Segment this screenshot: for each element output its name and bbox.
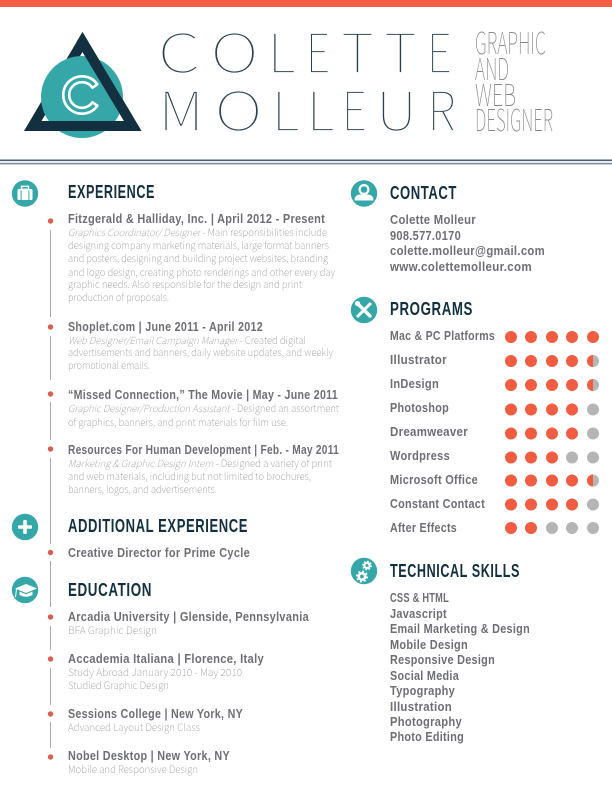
job: Resources For Human Development: Marketing & Graphic Design Intern - Designed a variety of print [68,456,333,470]
heading: experience: EXPERIENCE [68,182,155,202]
job: Missed Connection [68,387,340,429]
title: name [158,10,455,147]
title: name: C [158,10,200,88]
job: Shoplet.com [68,319,333,372]
title: name: O [215,69,262,146]
rating: Dreamweaver: Dreamweaver [390,424,468,439]
text: skills list: Email Marketing & Design [390,621,530,636]
job: Fitzgerald & Halliday: designing company marketing materials, large format banners [68,238,329,252]
rating: Mac & PC Platforms [390,328,599,343]
title: name: E [306,10,330,88]
rating: Photoshop: Photoshop [390,400,449,415]
job: Missed Connection: “Missed Connection,” The Movie | May - June 2011 [68,387,338,402]
school: Sessions College [68,706,243,734]
heading: additional experience: ADDITIONAL EXPERIENCE [68,516,248,536]
school: Sessions College: Advanced Layout Design Class [68,720,200,734]
text: creative director: Creative Director for Prime Cycle [68,545,250,560]
school: Accademia Italiana: Studied Graphic Design [68,678,169,692]
subtitle: graphic and web designer: WEB [475,71,516,115]
title: name: L [268,11,295,88]
panel: additional experience [12,514,250,560]
school: Arcadia University [68,609,309,637]
text: contact details: 908.577.0170 [390,228,461,243]
school: Nobel Desktop [68,748,230,776]
panel: contact [351,180,545,274]
job: Fitzgerald & Halliday: graphic needs. Also responsible for the design and print [68,277,303,291]
timeline: left column [48,218,53,760]
icon: person [351,180,377,207]
title: name: U [376,69,417,146]
title: name: T [384,10,417,88]
heading: education: EDUCATION [68,580,152,600]
rating: Photoshop [390,400,599,416]
rating: Illustrator [390,352,599,367]
icon: crossed tools [351,297,377,323]
text: skills list [390,590,530,744]
rating: InDesign [390,376,599,391]
job: Resources For Human Development [68,442,339,496]
school: Arcadia University: BFA Graphic Design [68,623,157,637]
job: Fitzgerald & Halliday: production of proposals. [68,290,169,304]
icon: logo triangle with circle and C [24,32,142,138]
panel: technical skills [351,558,530,744]
subtitle: graphic and web designer [475,19,553,140]
job: Resources For Human Development: and web materials, including but not limited to brochures, [68,469,311,483]
job: Shoplet.com: advertisements and banners, daily website updates, and weekly [68,345,333,359]
job: Fitzgerald & Halliday: Fitzgerald & Halliday, Inc. | April 2012 - Present [68,211,325,226]
icon: graduation cap [12,577,38,603]
text: skills list: Typography [390,683,455,698]
rating: Wordpress: Wordpress [390,448,450,463]
job: Resources For Human Development: banners, logos, and advertisements. [68,482,217,496]
rating: Microsoft Office: Microsoft Office [390,472,478,487]
text: skills list: Social Media [390,668,459,683]
icon: plus [12,514,38,540]
text: skills list: Responsive Design [390,652,495,667]
school: Arcadia University: Arcadia University | Glenside, Pennsylvania [68,609,309,624]
school: Accademia Italiana [68,651,264,692]
rating: After Effects [390,520,599,535]
rating: Illustrator: Illustrator [390,352,447,367]
job: Shoplet.com: Web Designer/Email Campaign Manager - Created digital [68,333,306,347]
school: Nobel Desktop: Nobel Desktop | New York, NY [68,748,230,763]
rating: Constant Contact [390,496,599,511]
school: Accademia Italiana: Study Abroad January 2010 - May 2010 [68,665,242,679]
title: name: E [342,69,367,147]
subtitle: graphic and web designer: GRAPHIC [475,19,546,63]
school: Sessions College: Sessions College | New York, NY [68,706,243,721]
job: Missed Connection: of graphics, banners, and print materials for film use. [68,415,288,429]
job: Fitzgerald & Halliday: and logo design, creating photo renderings and other every day [68,265,335,279]
title: name: M [159,69,203,147]
text: skills list: Photo Editing [390,729,464,744]
subtitle: graphic and web designer: AND [475,45,509,89]
title: name: R [428,69,455,146]
panel: experience [12,180,340,496]
text: skills list: Mobile Design [390,637,468,652]
title: name: O [211,11,258,88]
rating: Mac & PC Platforms: Mac & PC Platforms [390,328,495,343]
heading: programs: PROGRAMS [390,299,473,319]
rating: InDesign: InDesign [390,376,439,391]
job: Fitzgerald & Halliday [68,211,335,304]
subtitle: graphic and web designer: DESIGNER [475,96,553,140]
title: name: E [427,11,452,89]
heading: contact: CONTACT [390,183,457,203]
text: skills list: Illustration [390,699,452,714]
panel: programs [351,297,599,535]
job: Shoplet.com: Shoplet.com | June 2011 - April 2012 [68,319,263,334]
rating: Microsoft Office [390,472,599,487]
title: name: L [272,69,299,146]
job: Fitzgerald & Halliday: and posters, designing and building project websites, branding [68,251,329,265]
top accent bar [0,0,612,7]
school: Accademia Italiana: Accademia Italiana | Florence, Italy [68,651,264,666]
panel: education [12,577,309,776]
text: skills list: Javascript [390,606,447,621]
job: Fitzgerald & Halliday: Graphics Coordinator/ Designer - Main responsibilities include [68,225,327,239]
text: contact details: colette.molleur@gmail.com [390,243,545,258]
job: Shoplet.com: promotional emails. [68,358,150,372]
rating: Constant Contact: Constant Contact [390,496,485,511]
heading: technical skills: TECHNICAL SKILLS [390,561,520,581]
rating: After Effects: After Effects [390,520,457,535]
rating: Dreamweaver [390,424,599,440]
job: Resources For Human Development: Resources For Human Development | Feb. - May 2011 [68,442,339,457]
title: name: L [307,69,334,146]
title: name: T [341,10,374,88]
text: skills list: Photography [390,714,462,729]
school: Nobel Desktop: Mobile and Responsive Design [68,762,198,776]
icon: gears [351,558,377,584]
text: contact details: Colette Molleur [390,212,476,227]
text: skills list: CSS & HTML [390,590,449,605]
rating: Wordpress [390,448,599,464]
text: contact details [389,212,545,274]
icon: briefcase [12,180,38,207]
text: contact details: www.colettemolleur.com [389,259,532,274]
job: Missed Connection: Graphic Designer/Production Assistant - Designed an assortment [68,401,340,415]
